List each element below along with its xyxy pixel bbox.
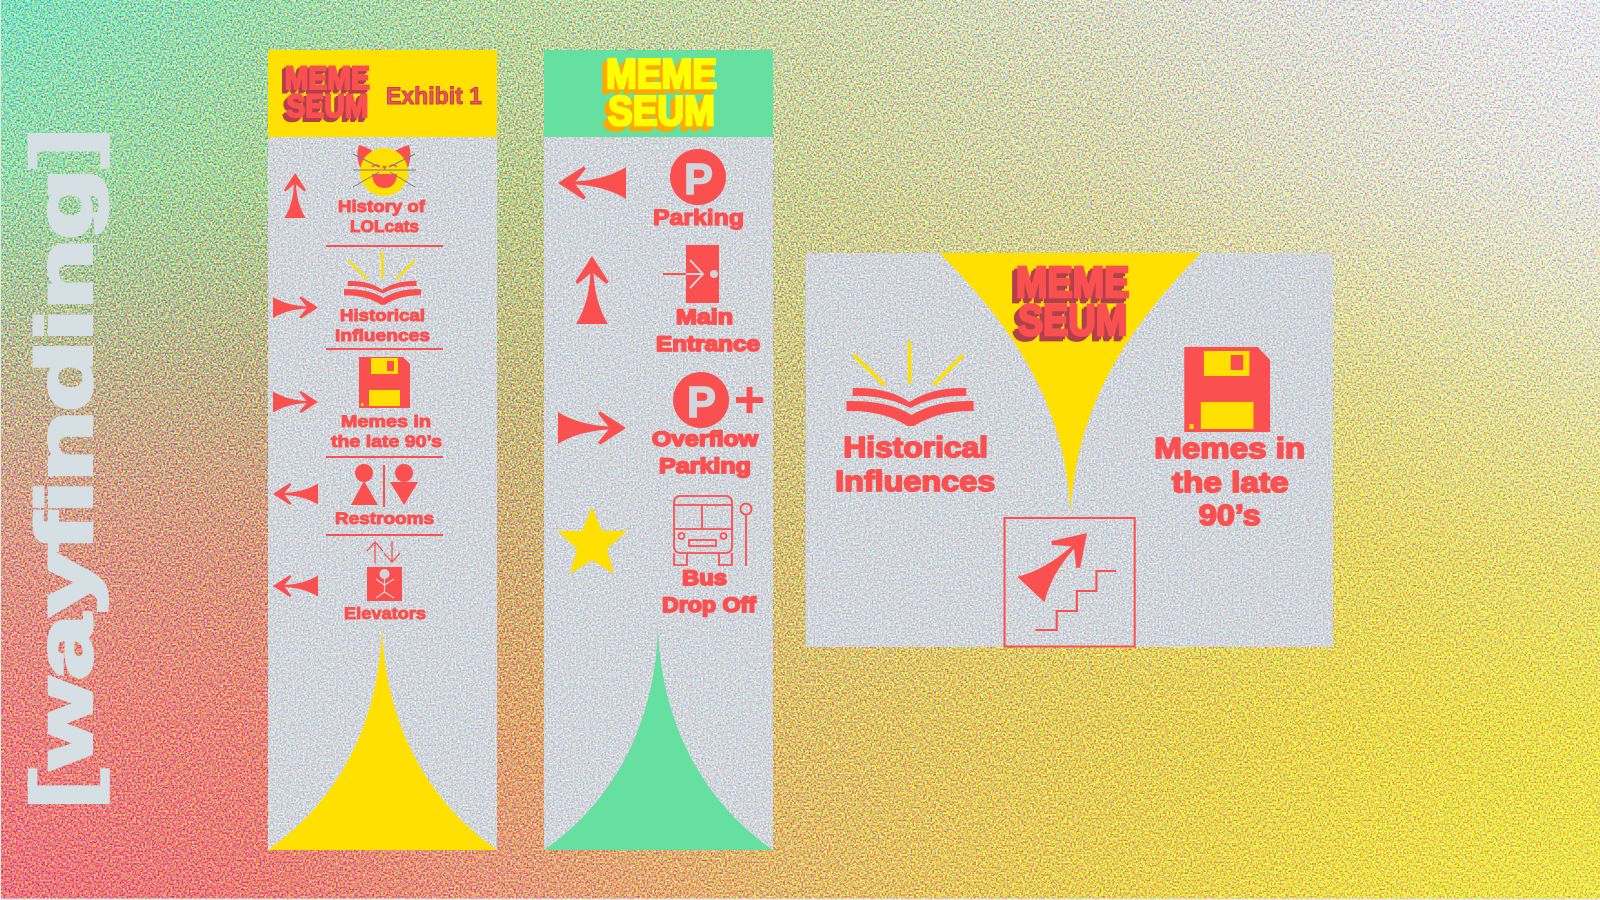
logo: memeseum: SEUM <box>1013 302 1122 350</box>
yellow funnel <box>939 253 1201 515</box>
arrow: diagonal up <box>1017 520 1101 603</box>
arrow: right to memes in the late 90s <box>273 391 318 413</box>
logo: memeseum: SEUM <box>1018 297 1127 345</box>
logo: memeseum: SEUM <box>608 87 715 134</box>
label: memes in the late 90s: Memes in <box>341 412 431 431</box>
logo: memeseum: MEME <box>281 64 366 100</box>
label: restrooms: Restrooms <box>335 509 434 528</box>
arrow: left to parking <box>558 166 626 200</box>
label: memes in the late 90s: the late <box>1172 466 1289 499</box>
panel body <box>268 137 497 850</box>
label: historical influences: Historical <box>843 431 988 464</box>
logo: memeseum: MEME <box>606 50 717 97</box>
label: main entrance <box>656 306 760 356</box>
label: historical influences: Influences <box>335 326 430 345</box>
icon: overflow parking <box>673 372 763 428</box>
icon: parking: P <box>684 155 713 204</box>
title: wayfinding: [wayfinding] <box>14 127 110 810</box>
icon: open book <box>344 252 421 305</box>
arrow: left to restrooms <box>273 483 318 505</box>
panel body <box>544 137 773 850</box>
logo: memeseum: SEUM <box>1015 300 1124 348</box>
panel: visitor directory <box>544 50 773 850</box>
icon: elevator <box>367 541 402 601</box>
label: memes in the late 90s: Memes in <box>1154 432 1305 465</box>
arrow: right to historical influences <box>273 296 318 318</box>
label: overflow parking: Parking <box>659 455 751 478</box>
logo: memeseum: SEUM <box>603 92 710 139</box>
label: historical influences <box>335 306 430 345</box>
label: memes in the late 90s <box>331 412 442 451</box>
logo: memeseum: MEME <box>285 60 370 96</box>
icon: floppy disk <box>359 357 410 408</box>
logo: memeseum: MEME <box>603 53 714 100</box>
logo: memeseum: MEME <box>1011 264 1124 312</box>
label: exhibit 1: Exhibit 1 <box>386 83 482 110</box>
logo: memeseum: MEME <box>601 55 712 102</box>
logo: memeseum: SEUM <box>283 92 365 128</box>
logo: memeseum: SEUM <box>286 88 368 124</box>
arrow: right to overflow parking <box>558 411 626 445</box>
decorative bottom spike <box>544 625 773 850</box>
label: bus drop off <box>662 567 757 617</box>
logo: memeseum: SEUM <box>284 90 366 126</box>
logo: memeseum: SEUM <box>605 90 712 137</box>
icon: floppy disk <box>1184 347 1270 432</box>
label: history of lolcats: History of <box>338 197 425 216</box>
label: history of lolcats <box>338 197 425 236</box>
icon: lolcat <box>353 145 416 196</box>
label: memes in the late 90s: 90’s <box>1199 499 1261 532</box>
arrow: left to elevators <box>273 575 318 597</box>
label: historical influences: Influences <box>835 465 995 498</box>
icon: restrooms <box>351 464 418 507</box>
logo: memeseum: MEME <box>283 62 368 98</box>
logo: memeseum <box>281 60 370 128</box>
icon: star <box>558 507 627 574</box>
icon: parking <box>670 149 726 205</box>
label: overflow parking <box>652 428 759 478</box>
label: historical influences: Historical <box>340 306 425 325</box>
icon: main entrance door <box>663 245 719 303</box>
panel body <box>805 253 1333 647</box>
arrow: up to lolcats <box>284 173 306 218</box>
label: bus drop off: Bus <box>682 567 727 590</box>
label: bus drop off: Drop Off <box>662 594 757 617</box>
header band <box>544 50 773 137</box>
icon: stairs up <box>1005 518 1135 646</box>
label: main entrance: Entrance <box>656 333 760 356</box>
icon: overflow parking: P <box>687 378 716 427</box>
label: historical influences <box>835 431 995 498</box>
label: elevators: Elevators <box>344 604 426 623</box>
label: memes in the late 90s <box>1154 432 1305 532</box>
label: parking: Parking <box>653 205 744 230</box>
label: main entrance: Main <box>676 306 733 329</box>
label: overflow parking: Overflow <box>652 428 759 451</box>
icon: open book <box>846 341 974 426</box>
logo: memeseum: MEME <box>1016 259 1129 307</box>
icon: bus stop <box>674 496 752 566</box>
label: memes in the late 90s: the late 90’s <box>331 432 442 451</box>
logo: memeseum <box>601 50 717 139</box>
arrow: up to main entrance <box>575 256 609 324</box>
header band <box>268 50 497 137</box>
logo: memeseum <box>1011 259 1129 350</box>
panel: exhibit 1 directory <box>268 50 497 850</box>
decorative bottom spike <box>268 625 497 850</box>
logo: memeseum: MEME <box>1013 262 1126 310</box>
panel: directional sign <box>805 253 1333 647</box>
label: history of lolcats: LOLcats <box>350 217 419 236</box>
